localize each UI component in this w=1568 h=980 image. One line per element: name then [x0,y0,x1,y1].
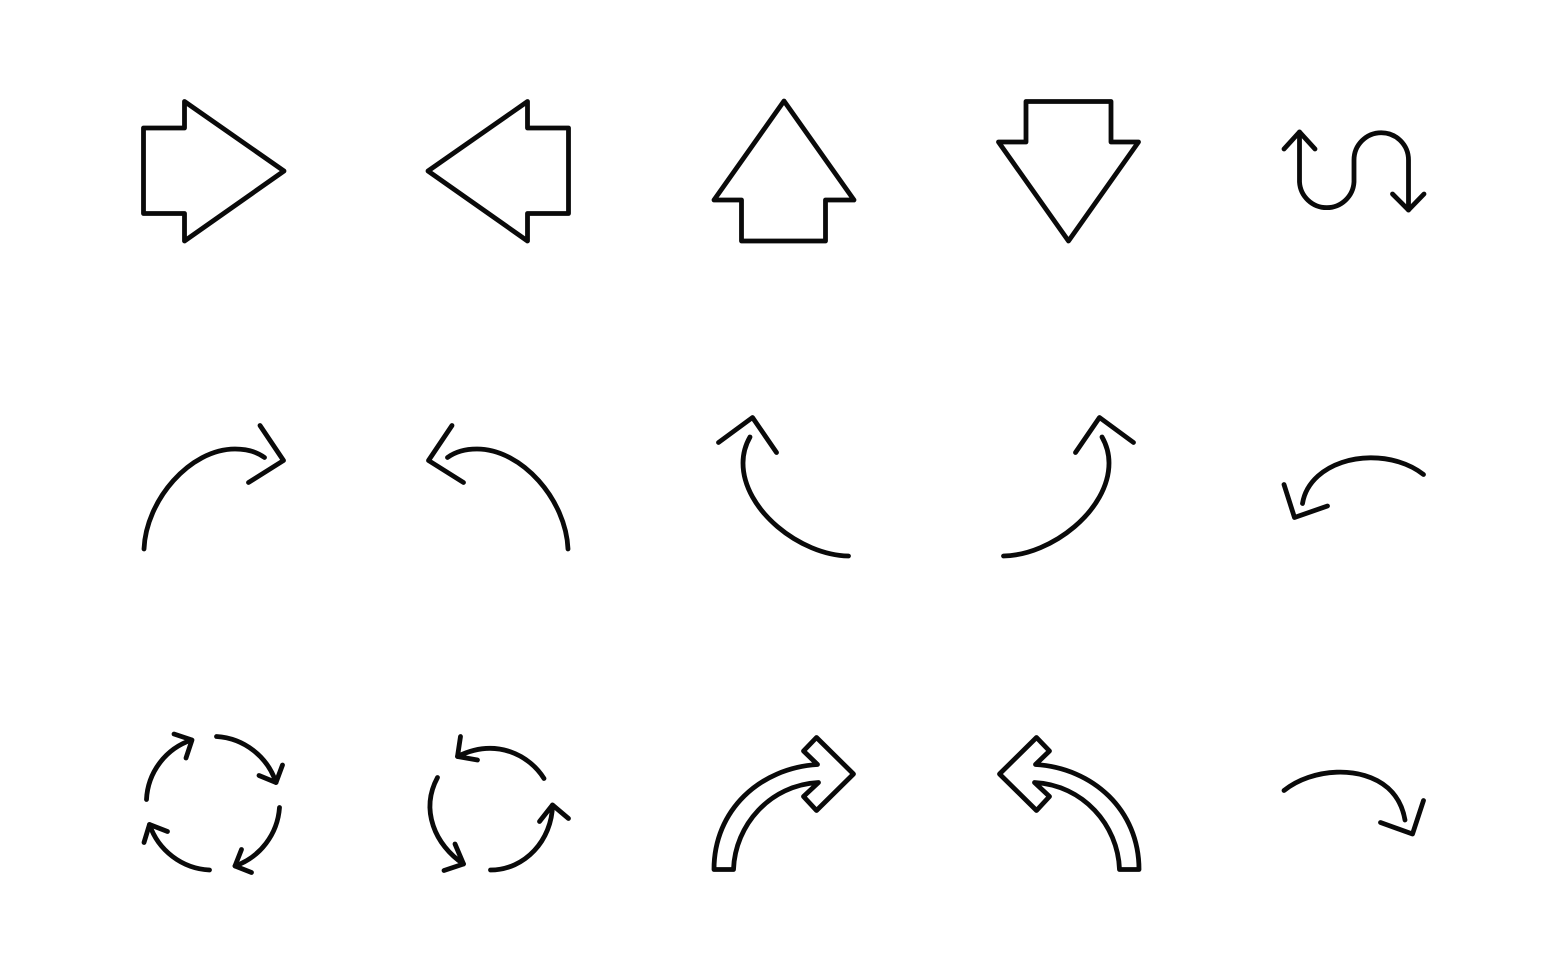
icon: shallow curved arrow down-right [1284,772,1424,834]
icon: block arrow up [714,101,854,241]
icon: outlined curved arrow right [714,738,854,870]
icon: three-arrow cycle [430,736,568,870]
icon: block arrow left [428,102,568,241]
icon: block arrow right [144,102,284,241]
icon: outlined curved arrow left [1000,738,1139,870]
icon: four-arrow cycle [144,734,282,872]
icon: S-curve double arrow [1284,132,1424,210]
icon: curved arrow left [428,426,568,549]
icon: curved arrow up-left [718,418,848,556]
icon: curved arrow right [144,426,284,549]
icon: shallow curved arrow down-left [1284,458,1424,518]
icon: curved arrow up-right [1004,418,1134,556]
icon: block arrow down [998,102,1138,241]
